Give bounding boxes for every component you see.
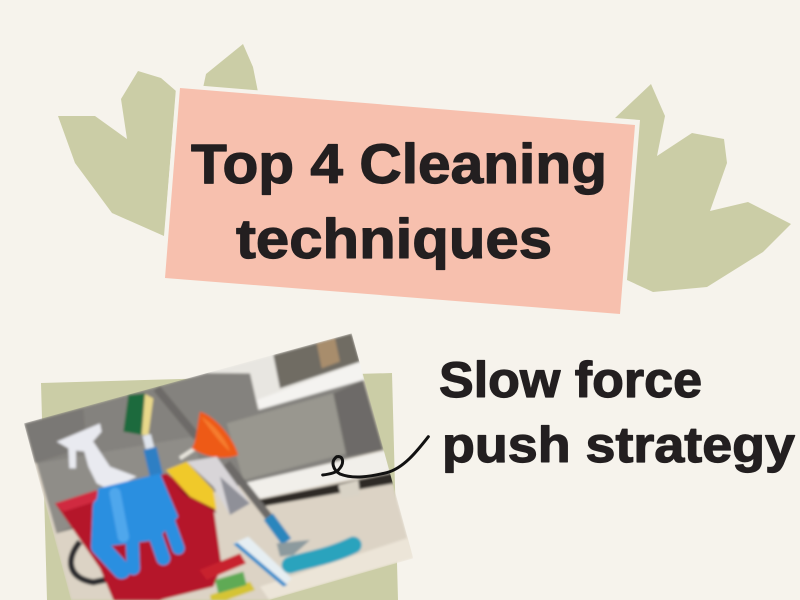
floor light patch [260, 537, 413, 600]
wall and window [207, 333, 365, 410]
title text: techniques [236, 207, 552, 270]
grey sofa [24, 373, 383, 533]
title panel [165, 88, 635, 314]
photo: cleaning supplies [24, 333, 413, 600]
right leaf decoration [615, 84, 791, 292]
technique label: push strategy [442, 417, 795, 473]
squiggle connector line [323, 437, 428, 477]
scrub sponge [123, 393, 157, 477]
title text: Top 4 Cleaning [191, 132, 607, 195]
technique label: Slow force [439, 352, 702, 408]
blue rubber gloves [93, 473, 178, 570]
mop blue collar [268, 517, 287, 542]
spray bottle [57, 423, 137, 490]
left leaf decoration [58, 44, 258, 236]
floor [35, 382, 408, 600]
photo backing panel [41, 373, 398, 600]
technique label [439, 352, 795, 473]
red bucket [55, 473, 222, 600]
blue mop head [233, 537, 353, 587]
plunger [180, 412, 238, 458]
yellow and white cloths [166, 457, 250, 515]
title text [191, 132, 607, 270]
sofa base and shadow [243, 450, 394, 507]
mop handle [157, 388, 270, 518]
stacked sponges [199, 553, 255, 600]
